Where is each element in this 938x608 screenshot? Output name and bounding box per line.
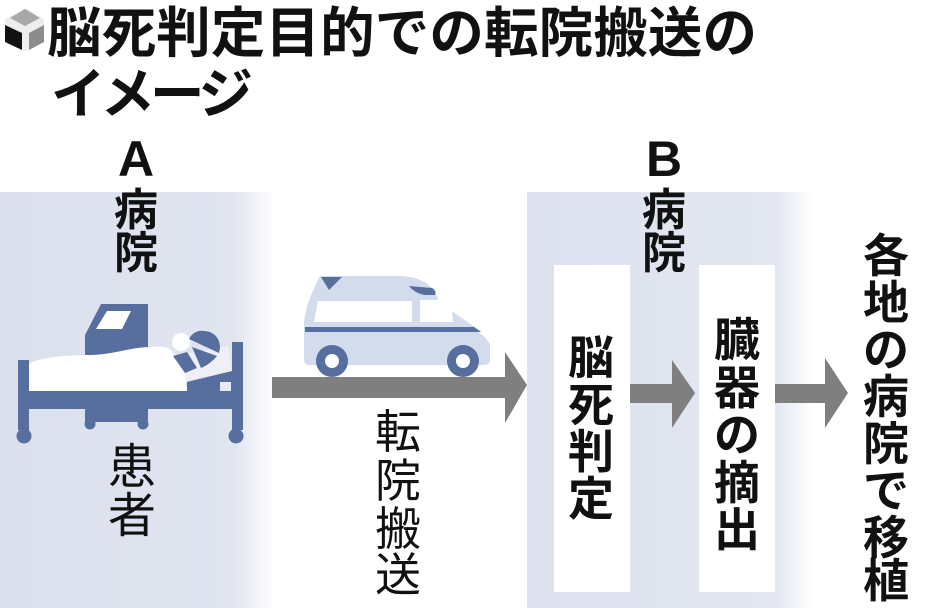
panel: brain death determination: 判 bbox=[568, 426, 614, 478]
label: transfer: 転 bbox=[375, 406, 421, 458]
panel: organ extraction: 臓 bbox=[714, 314, 760, 366]
panel: hospital A background bbox=[0, 192, 275, 608]
label: transplant at hospitals across the country: 院 bbox=[863, 418, 909, 470]
panel: brain death determination: 定 bbox=[568, 473, 614, 525]
arrow: transfer bbox=[272, 352, 527, 423]
title: イメージ bbox=[51, 64, 253, 125]
panel: brain death determination: 脳 bbox=[568, 332, 614, 384]
label: transfer: 院 bbox=[375, 455, 421, 507]
label: transplant at hospitals across the country: 各 bbox=[863, 230, 909, 282]
heading: hospital A: A bbox=[118, 131, 154, 187]
title: 脳死判定目的での転院搬送の bbox=[47, 3, 757, 64]
heading: hospital B: B bbox=[646, 131, 682, 187]
label: transplant at hospitals across the country: 地 bbox=[863, 277, 909, 329]
label: patient: 患 bbox=[108, 441, 156, 494]
icon: patient in hospital bed with monitor bbox=[16, 304, 244, 444]
arrow: extraction to transplant bbox=[775, 358, 848, 428]
label: transplant at hospitals across the country: で bbox=[863, 465, 909, 517]
label: transfer: 搬 bbox=[375, 503, 421, 555]
heading: hospital B bbox=[642, 131, 686, 278]
label: transplant at hospitals across the country: 移 bbox=[863, 512, 909, 564]
icon: ambulance bbox=[304, 276, 490, 377]
panel: brain death determination: 死 bbox=[568, 379, 614, 431]
arrow: determination to extraction bbox=[630, 360, 695, 428]
panel: organ extraction bbox=[699, 265, 775, 592]
panel: brain death determination bbox=[554, 265, 630, 592]
label: transplant at hospitals across the country: 植 bbox=[863, 555, 909, 607]
panel: organ extraction: の bbox=[714, 409, 760, 461]
heading: hospital B: 院 bbox=[642, 229, 686, 278]
label: transfer: 送 bbox=[375, 549, 421, 601]
icon: title cube bbox=[5, 8, 44, 51]
heading: hospital A bbox=[114, 131, 158, 278]
panel: organ extraction: 出 bbox=[714, 504, 760, 556]
label: transplant at hospitals across the country bbox=[863, 230, 909, 607]
label: transplant at hospitals across the country: の bbox=[863, 324, 909, 376]
heading: hospital A: 病 bbox=[114, 186, 158, 235]
label: transfer bbox=[375, 406, 421, 601]
title bbox=[47, 3, 757, 125]
heading: hospital B: 病 bbox=[642, 186, 686, 235]
label: transplant at hospitals across the country: 病 bbox=[863, 371, 909, 423]
panel: hospital B background bbox=[527, 192, 812, 608]
label: patient bbox=[108, 441, 156, 543]
label: patient: 者 bbox=[108, 490, 156, 543]
heading: hospital A: 院 bbox=[114, 229, 158, 278]
panel: organ extraction: 摘 bbox=[714, 457, 760, 509]
panel: organ extraction: 器 bbox=[714, 362, 760, 414]
